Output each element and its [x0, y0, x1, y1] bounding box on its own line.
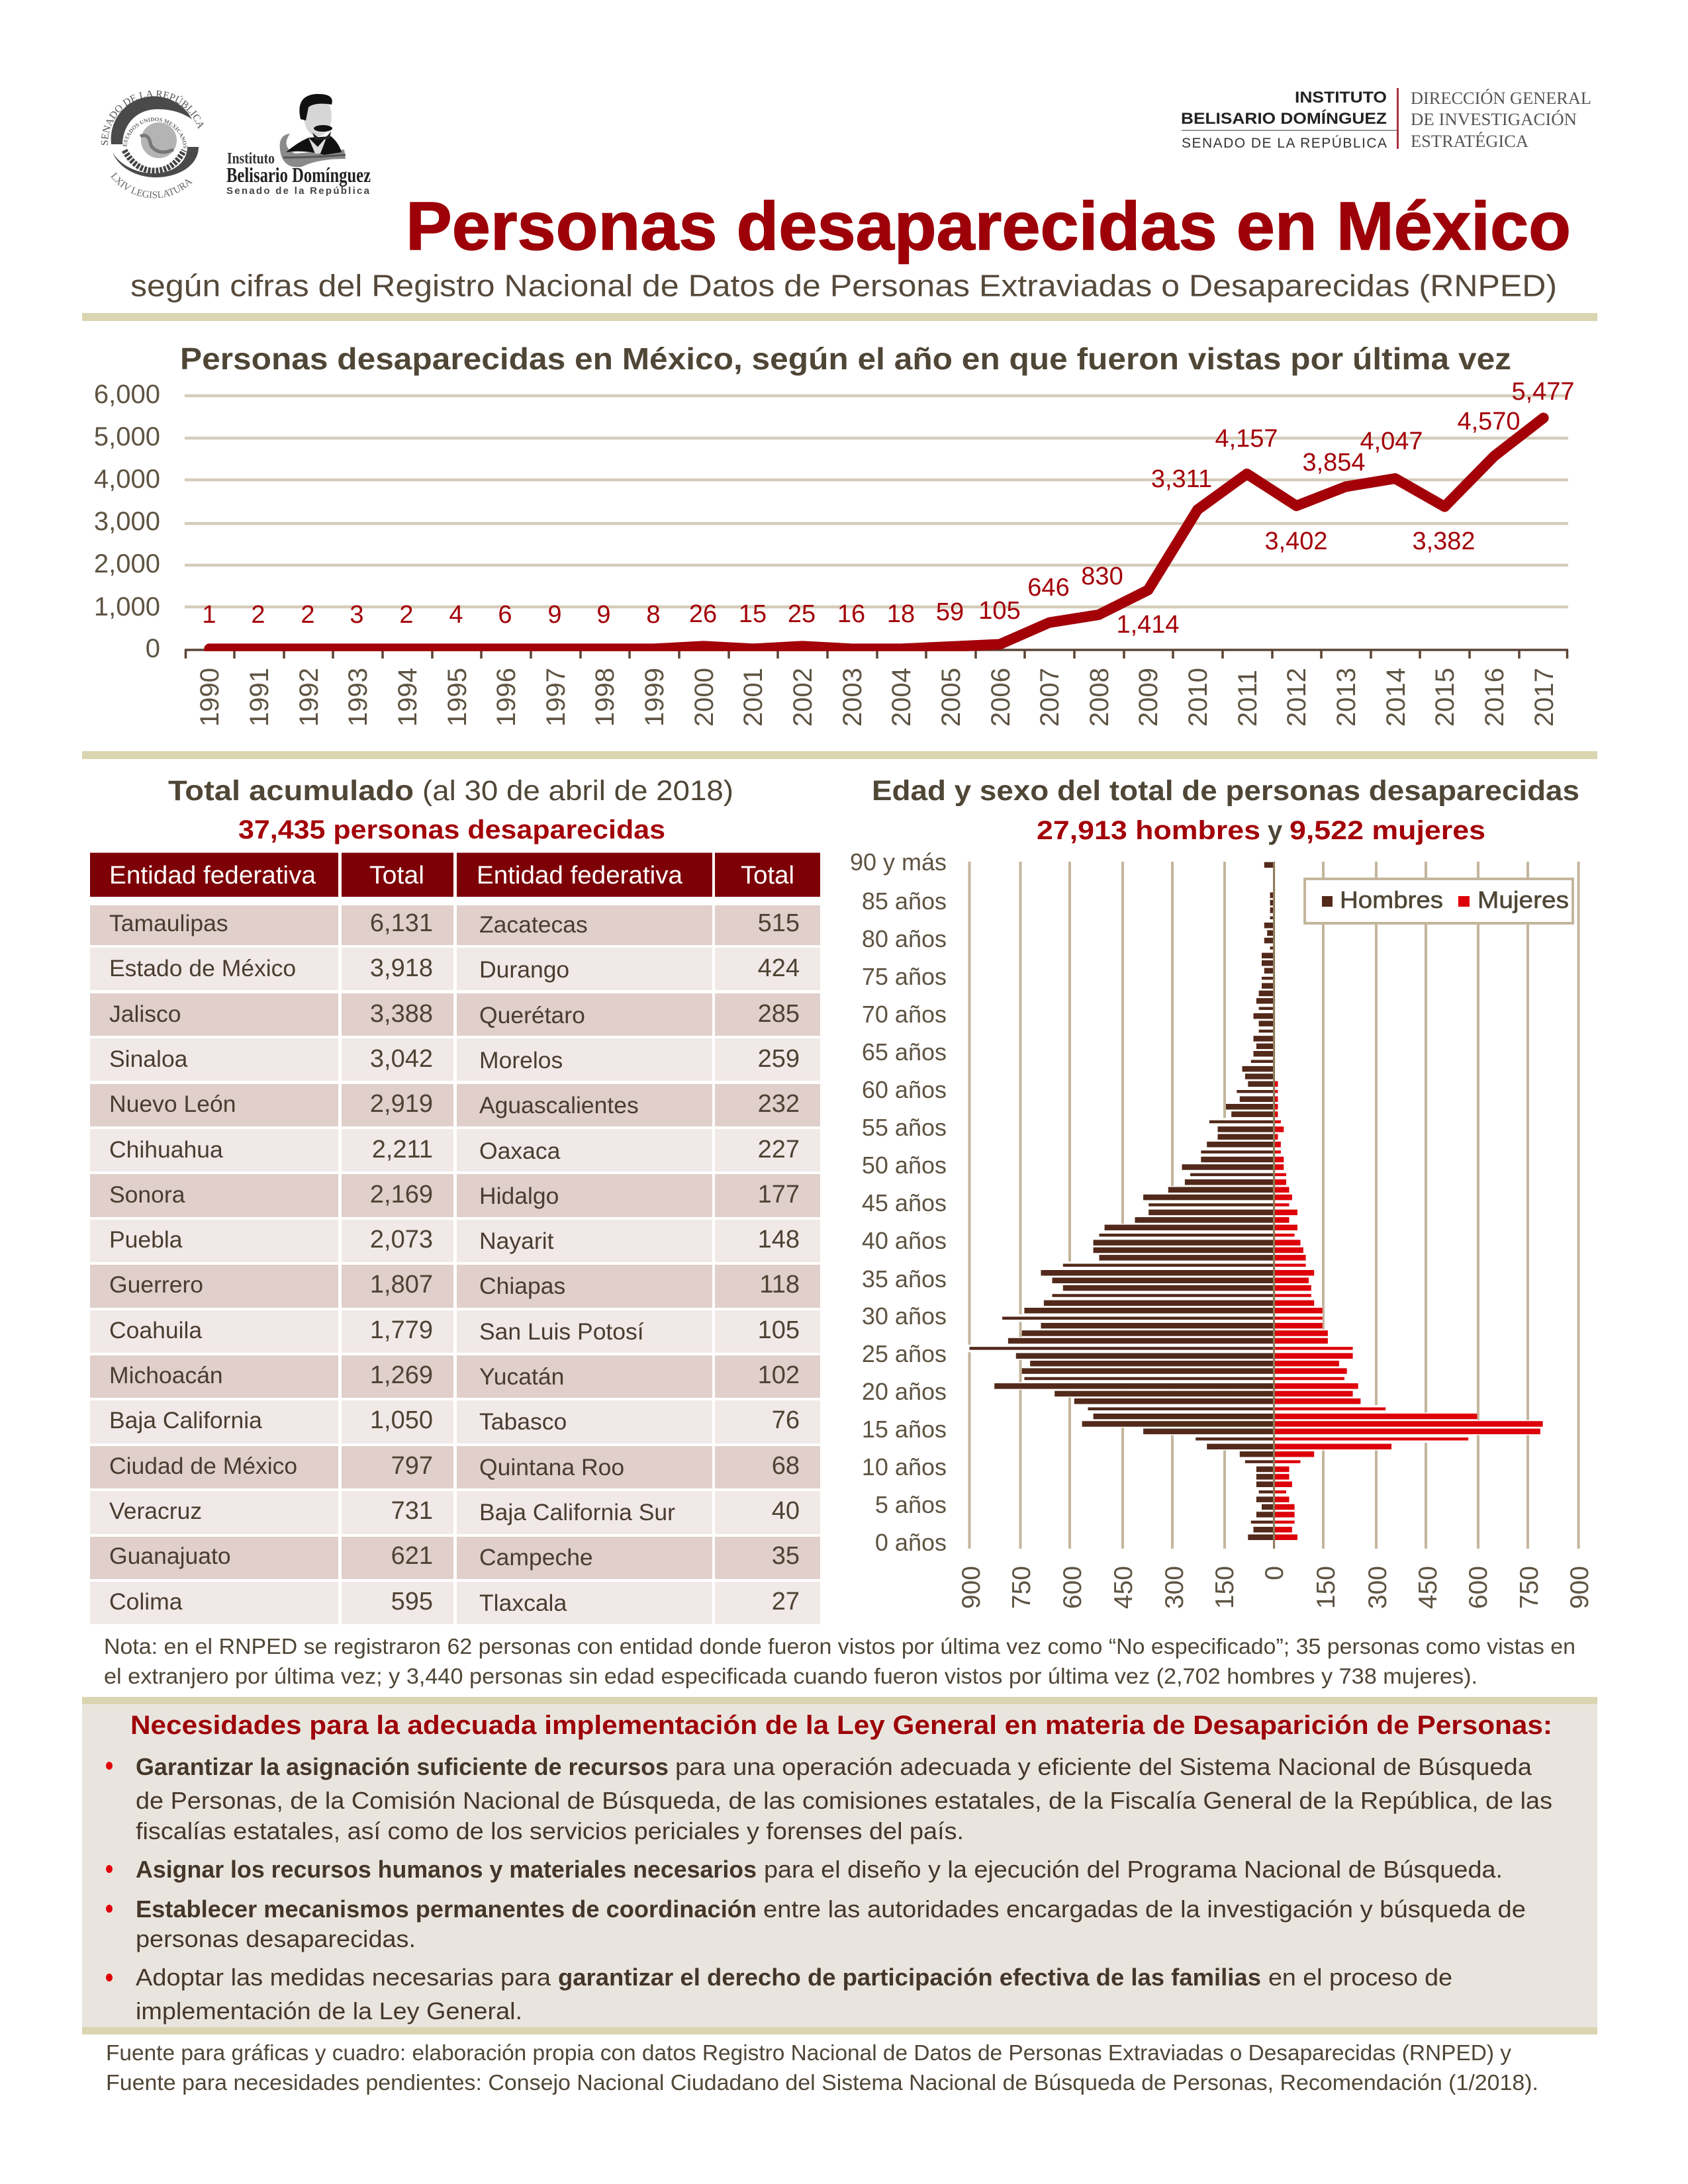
panel: population pyramid [850, 775, 1594, 1609]
table rows: Tabasco [479, 1408, 567, 1435]
table rows: Chiapas [479, 1273, 565, 1299]
table rows: 1,779 [370, 1316, 433, 1344]
data labels: 830 [1081, 563, 1123, 590]
age labels: 60 años [862, 1076, 947, 1103]
bullet 4: en el proceso de [1268, 1964, 1452, 1991]
panel: necesidades [82, 1697, 1597, 2034]
data labels: 18 [887, 600, 915, 628]
table rows: 1,050 [370, 1406, 433, 1434]
table rows: 2,919 [370, 1090, 433, 1118]
table rows: Nuevo León [109, 1091, 236, 1117]
table rows: Baja California Sur [479, 1499, 675, 1525]
table rows: 148 [758, 1226, 800, 1253]
trend line [209, 418, 1544, 649]
table rows: 105 [758, 1316, 800, 1344]
year labels: 2002 [788, 668, 818, 727]
bullet 2: Asignar los recursos humanos y materiales necesarios [136, 1856, 757, 1883]
bullet 2: para el diseño y la ejecución del Programa Nacional de Búsqueda. [764, 1856, 1503, 1883]
table rows: Oaxaca [479, 1138, 561, 1164]
year labels: 2000 [690, 668, 719, 727]
legend [1305, 879, 1573, 923]
year labels: 2013 [1332, 668, 1361, 727]
table header: Total [369, 862, 424, 889]
table rows: Aguascalientes [479, 1092, 639, 1118]
age labels: 30 años [862, 1302, 947, 1330]
table header: Total [741, 862, 794, 889]
data labels: 3 [350, 601, 364, 629]
x axis labels: 300 [1160, 1566, 1189, 1609]
table rows: 595 [391, 1588, 433, 1615]
table rows: Tlaxcala [479, 1590, 567, 1616]
x axis labels: 150 [1312, 1566, 1340, 1609]
x axis labels: 300 [1364, 1566, 1392, 1609]
table rows: Estado de México [109, 955, 296, 981]
table rows [90, 905, 820, 1624]
year labels: 1990 [195, 668, 224, 727]
table rows: 177 [758, 1181, 800, 1208]
table rows: 27 [772, 1588, 800, 1615]
year labels: 2004 [887, 668, 916, 727]
table rows: 35 [772, 1542, 800, 1570]
age labels: 65 años [862, 1038, 947, 1066]
year labels: 1996 [492, 668, 521, 727]
bars: hombres [969, 865, 1273, 1537]
heading: total acumulado: (al 30 de abril de 2018) [422, 775, 733, 807]
table rows: 227 [758, 1136, 800, 1163]
table rows: 1,269 [370, 1361, 433, 1389]
year labels: 2017 [1530, 668, 1559, 727]
totals by sex: y [1268, 816, 1283, 845]
table header: Entidad federativa [477, 862, 683, 889]
table rows: 76 [772, 1406, 800, 1434]
table rows: 40 [772, 1497, 800, 1525]
year labels: 1999 [640, 668, 669, 727]
age labels: 70 años [862, 1001, 947, 1028]
logo: Instituto Belisario Domínguez portrait: Instituto [227, 150, 275, 167]
table rows: Guanajuato [109, 1543, 231, 1569]
heading: total acumulado [168, 775, 733, 807]
logo: Instituto Belisario Domínguez, Dirección General de Investigación Estratégica: BELISARIO DOMÍNGUEZ [1181, 109, 1387, 128]
age labels: 20 años [862, 1378, 947, 1405]
year labels: 2005 [937, 668, 966, 727]
year labels: 2001 [739, 668, 768, 727]
table rows: Colima [109, 1588, 183, 1615]
age labels: 90 y más [850, 848, 947, 876]
year labels: 1994 [393, 668, 422, 727]
table rows: Sinaloa [109, 1046, 188, 1072]
bullet 1 [106, 1753, 1552, 1844]
totals by sex: 9,522 mujeres [1289, 816, 1485, 845]
data labels: 2 [301, 601, 315, 629]
data labels: 4 [449, 601, 463, 629]
x axis labels: 450 [1109, 1566, 1138, 1609]
table rows: 797 [391, 1452, 433, 1480]
data labels: 15 [739, 600, 767, 628]
table rows: Sonora [109, 1181, 185, 1208]
y axis labels: 0 [146, 634, 160, 663]
bullet 3: entre las autoridades encargadas de la investigación y búsqueda de [763, 1895, 1526, 1923]
table rows: 2,073 [370, 1226, 433, 1253]
table rows: 118 [759, 1271, 800, 1298]
table rows: Puebla [109, 1226, 183, 1253]
table rows: Morelos [479, 1047, 563, 1073]
note: Nota: en el RNPED se registraron 62 personas con entidad donde fueron vistos por última vez como “No especificado”; 35 personas como vistas en [104, 1635, 1575, 1659]
year labels: 2011 [1233, 670, 1262, 727]
data labels: 3,854 [1302, 449, 1366, 477]
year labels: 2006 [986, 668, 1015, 727]
logo: Instituto Belisario Domínguez, Dirección General de Investigación Estratégica: ESTRATÉGICA [1411, 132, 1528, 151]
table rows: 285 [758, 1000, 800, 1028]
y axis labels: 5,000 [94, 422, 160, 451]
x axis labels [957, 1566, 1594, 1609]
age labels: 80 años [862, 925, 947, 952]
data labels: 6 [498, 601, 512, 629]
totals by sex: 27,913 hombres [1037, 816, 1260, 845]
legend: Mujeres [1477, 886, 1569, 913]
year labels: 2010 [1184, 668, 1213, 727]
data labels: 105 [978, 597, 1021, 625]
age labels: 25 años [862, 1340, 947, 1367]
bars: mujeres [1275, 1084, 1543, 1537]
table rows: Chihuahua [109, 1136, 223, 1163]
logo: Instituto Belisario Domínguez portrait [226, 94, 371, 197]
table rows: 102 [758, 1361, 800, 1389]
logo: Instituto Belisario Domínguez, Dirección General de Investigación Estratégica: DIRECCIÓN GENERAL [1411, 89, 1591, 108]
note: el extranjero por última vez; y 3,440 personas sin edad especificada cuando fueron vistos por última vez (2,702 hombres y 738 mujeres). [104, 1664, 1477, 1689]
data labels: 646 [1027, 574, 1070, 602]
table rows: 424 [758, 954, 800, 982]
data labels: 3,382 [1412, 527, 1476, 555]
table rows: Guerrero [109, 1271, 203, 1298]
table rows: Jalisco [109, 1001, 181, 1027]
table rows: Durango [479, 956, 569, 983]
data labels: 2 [251, 601, 265, 629]
table header: Entidad federativa [109, 862, 316, 889]
data labels: 9 [596, 601, 611, 629]
y axis labels: 2,000 [94, 549, 160, 578]
heading: necesidades: Necesidades para la adecuada implementación de la Ley General en materia de Desaparición de Personas: [130, 1711, 1552, 1740]
table rows: 621 [391, 1542, 433, 1570]
table rows: Nayarit [479, 1228, 554, 1254]
year labels: 1991 [245, 668, 274, 727]
x axis labels: 750 [1515, 1566, 1544, 1609]
panel: line chart by year last seen [94, 341, 1575, 727]
x axis labels: 150 [1211, 1566, 1239, 1609]
table rows: Tamaulipas [109, 910, 228, 936]
table rows: 731 [391, 1497, 433, 1525]
title: Personas desaparecidas en México [406, 188, 1571, 264]
table rows: 515 [758, 909, 800, 937]
bullet 3: personas desaparecidas. [136, 1925, 416, 1952]
y axis labels [94, 380, 160, 663]
table rows: 232 [758, 1090, 800, 1118]
year labels: 1998 [590, 668, 620, 727]
table rows: 259 [758, 1045, 800, 1073]
age labels: 15 años [862, 1416, 947, 1443]
x axis labels: 600 [1058, 1566, 1087, 1609]
age labels: 10 años [862, 1453, 947, 1480]
data labels: 4,047 [1360, 428, 1423, 455]
age labels: 50 años [862, 1152, 947, 1179]
sources: Fuente para gráficas y cuadro: elaboración propia con datos Registro Nacional de Datos de Personas Extraviadas o Desaparecidas (RNPED) y [106, 2041, 1511, 2066]
x axis labels: 750 [1008, 1566, 1036, 1609]
table rows: 1,807 [370, 1271, 433, 1298]
year labels: 2016 [1480, 668, 1509, 727]
legend: Hombres [1340, 886, 1443, 913]
year labels: 2009 [1134, 668, 1163, 727]
data labels: 3,402 [1264, 527, 1328, 555]
data labels: 16 [837, 600, 865, 628]
bullet 2 [106, 1856, 1503, 1883]
age labels: 35 años [862, 1265, 947, 1293]
age labels: 0 años [875, 1529, 947, 1556]
year labels: 1993 [344, 668, 373, 727]
year labels: 2012 [1282, 668, 1311, 727]
age labels: 45 años [862, 1189, 947, 1216]
subtitle: según cifras del Registro Nacional de Datos de Personas Extraviadas o Desaparecidas (RNPED) [130, 269, 1557, 303]
x axis labels: 0 [1260, 1566, 1289, 1580]
data labels: 5,477 [1511, 378, 1575, 406]
data labels [202, 378, 1575, 639]
table rows: Zacatecas [479, 911, 588, 938]
table rows: 3,042 [370, 1045, 433, 1073]
total persons: 37,435 personas desaparecidas [238, 815, 665, 844]
bullet 4: Adoptar las medidas necesarias para [136, 1964, 551, 1991]
x axis labels: 450 [1414, 1566, 1442, 1609]
table rows: Ciudad de México [109, 1453, 297, 1479]
age labels: 55 años [862, 1114, 947, 1141]
table rows: 3,918 [370, 954, 433, 982]
y axis labels: 1,000 [94, 592, 160, 621]
note [104, 1635, 1575, 1689]
logo: Instituto Belisario Domínguez, Dirección General de Investigación Estratégica [1181, 88, 1591, 151]
year labels: 1995 [443, 668, 472, 727]
table rows: 2,211 [372, 1136, 433, 1163]
heading: total acumulado: Total acumulado [168, 775, 414, 807]
table rows: 68 [772, 1452, 800, 1480]
table rows: Campeche [479, 1544, 593, 1570]
year labels [195, 668, 1559, 727]
data labels: 59 [936, 598, 964, 626]
bullet 3 [106, 1895, 1526, 1952]
table rows: Michoacán [109, 1362, 223, 1388]
data labels: 2 [399, 601, 414, 629]
year labels: 2007 [1035, 668, 1064, 727]
y axis labels: 3,000 [94, 507, 160, 536]
age labels [850, 848, 947, 1556]
age labels: 85 años [862, 887, 947, 915]
year labels: 1997 [541, 668, 571, 727]
logo: Instituto Belisario Domínguez, Dirección General de Investigación Estratégica: DE INVESTIGACIÓN [1411, 110, 1577, 129]
logo: Senado de la República seal: LXIV LEGISLATURA [111, 172, 193, 199]
data labels: 4,570 [1457, 408, 1521, 435]
year labels: 2008 [1085, 668, 1114, 727]
data labels: 3,311 [1151, 465, 1212, 493]
table rows: Baja California [109, 1407, 262, 1433]
logo: Instituto Belisario Domínguez portrait: Senado de la República [226, 185, 370, 197]
x axis labels: 900 [957, 1566, 986, 1609]
table rows: Veracruz [109, 1498, 202, 1524]
heading: age and sex: Edad y sexo del total de personas desaparecidas [872, 775, 1579, 807]
y axis labels: 4,000 [94, 465, 160, 494]
sources: Fuente para necesidades pendientes: Consejo Nacional Ciudadano del Sistema Nacional de Búsqueda de Personas, Recomendación (1/2018). [106, 2071, 1538, 2095]
table rows: Querétaro [479, 1002, 585, 1028]
bullet 1: de Personas, de la Comisión Nacional de Búsqueda, de las comisiones estatales, de la Fiscalía General de la República, de las [136, 1787, 1552, 1814]
sources [106, 2041, 1538, 2095]
panel: state table [90, 775, 820, 1624]
heading: line chart: Personas desaparecidas en México, según el año en que fueron vistas por última vez [180, 341, 1511, 376]
logo: Senado de la República seal [101, 90, 204, 199]
table rows: Hidalgo [479, 1183, 559, 1209]
logo: Senado de la República seal: SENADO DE LA REPÚBLICA [101, 90, 204, 146]
table rows: Quintana Roo [479, 1454, 624, 1480]
bullet 1: fiscalías estatales, así como de los servicios periciales y forenses del país. [136, 1817, 964, 1844]
x axis labels: 600 [1464, 1566, 1493, 1609]
table rows: 2,169 [370, 1181, 433, 1208]
x axis [185, 650, 1568, 659]
x axis labels: 900 [1566, 1566, 1594, 1609]
y axis labels: 6,000 [94, 380, 160, 409]
totals by sex [1037, 816, 1485, 845]
age labels: 40 años [862, 1227, 947, 1254]
age labels: 5 años [875, 1491, 947, 1518]
bullet 4 [106, 1964, 1452, 2025]
data labels: 25 [788, 600, 816, 628]
bullet 4: garantizar el derecho de participación efectiva de las familias [558, 1964, 1261, 1991]
data labels: 26 [689, 600, 717, 628]
logo: Instituto Belisario Domínguez, Dirección General de Investigación Estratégica: SENADO DE LA REPÚBLICA [1182, 136, 1387, 151]
table rows: 6,131 [370, 909, 433, 937]
logo: Instituto Belisario Domínguez, Dirección General de Investigación Estratégica: INSTITUTO [1295, 89, 1387, 107]
table rows: 3,388 [370, 1000, 433, 1028]
table rows: Yucatán [479, 1363, 564, 1390]
data labels: 9 [547, 601, 562, 629]
bullet 3: Establecer mecanismos permanentes de coordinación [136, 1895, 757, 1923]
age labels: 75 años [862, 963, 947, 990]
bullet 1: Garantizar la asignación suficiente de recursos [136, 1753, 669, 1780]
data labels: 4,157 [1215, 425, 1278, 453]
bullet 4: implementación de la Ley General. [136, 1997, 522, 2025]
year labels: 2015 [1430, 668, 1460, 727]
bullet 1: para una operación adecuada y eficiente del Sistema Nacional de Búsqueda [675, 1753, 1532, 1780]
data labels: 8 [646, 601, 661, 629]
table rows: San Luis Potosí [479, 1318, 644, 1345]
data labels: 1,414 [1116, 611, 1180, 639]
logo: Senado de la República seal: ESTADOS UNIDOS MEXICANOS [123, 118, 187, 148]
table header [90, 852, 820, 897]
year labels: 2003 [838, 668, 867, 727]
year labels: 2014 [1382, 668, 1411, 727]
table rows: Coahuila [109, 1317, 202, 1343]
logo: Instituto Belisario Domínguez portrait: Belisario Domínguez [226, 163, 371, 187]
year labels: 1992 [295, 668, 324, 727]
data labels: 1 [202, 601, 216, 629]
